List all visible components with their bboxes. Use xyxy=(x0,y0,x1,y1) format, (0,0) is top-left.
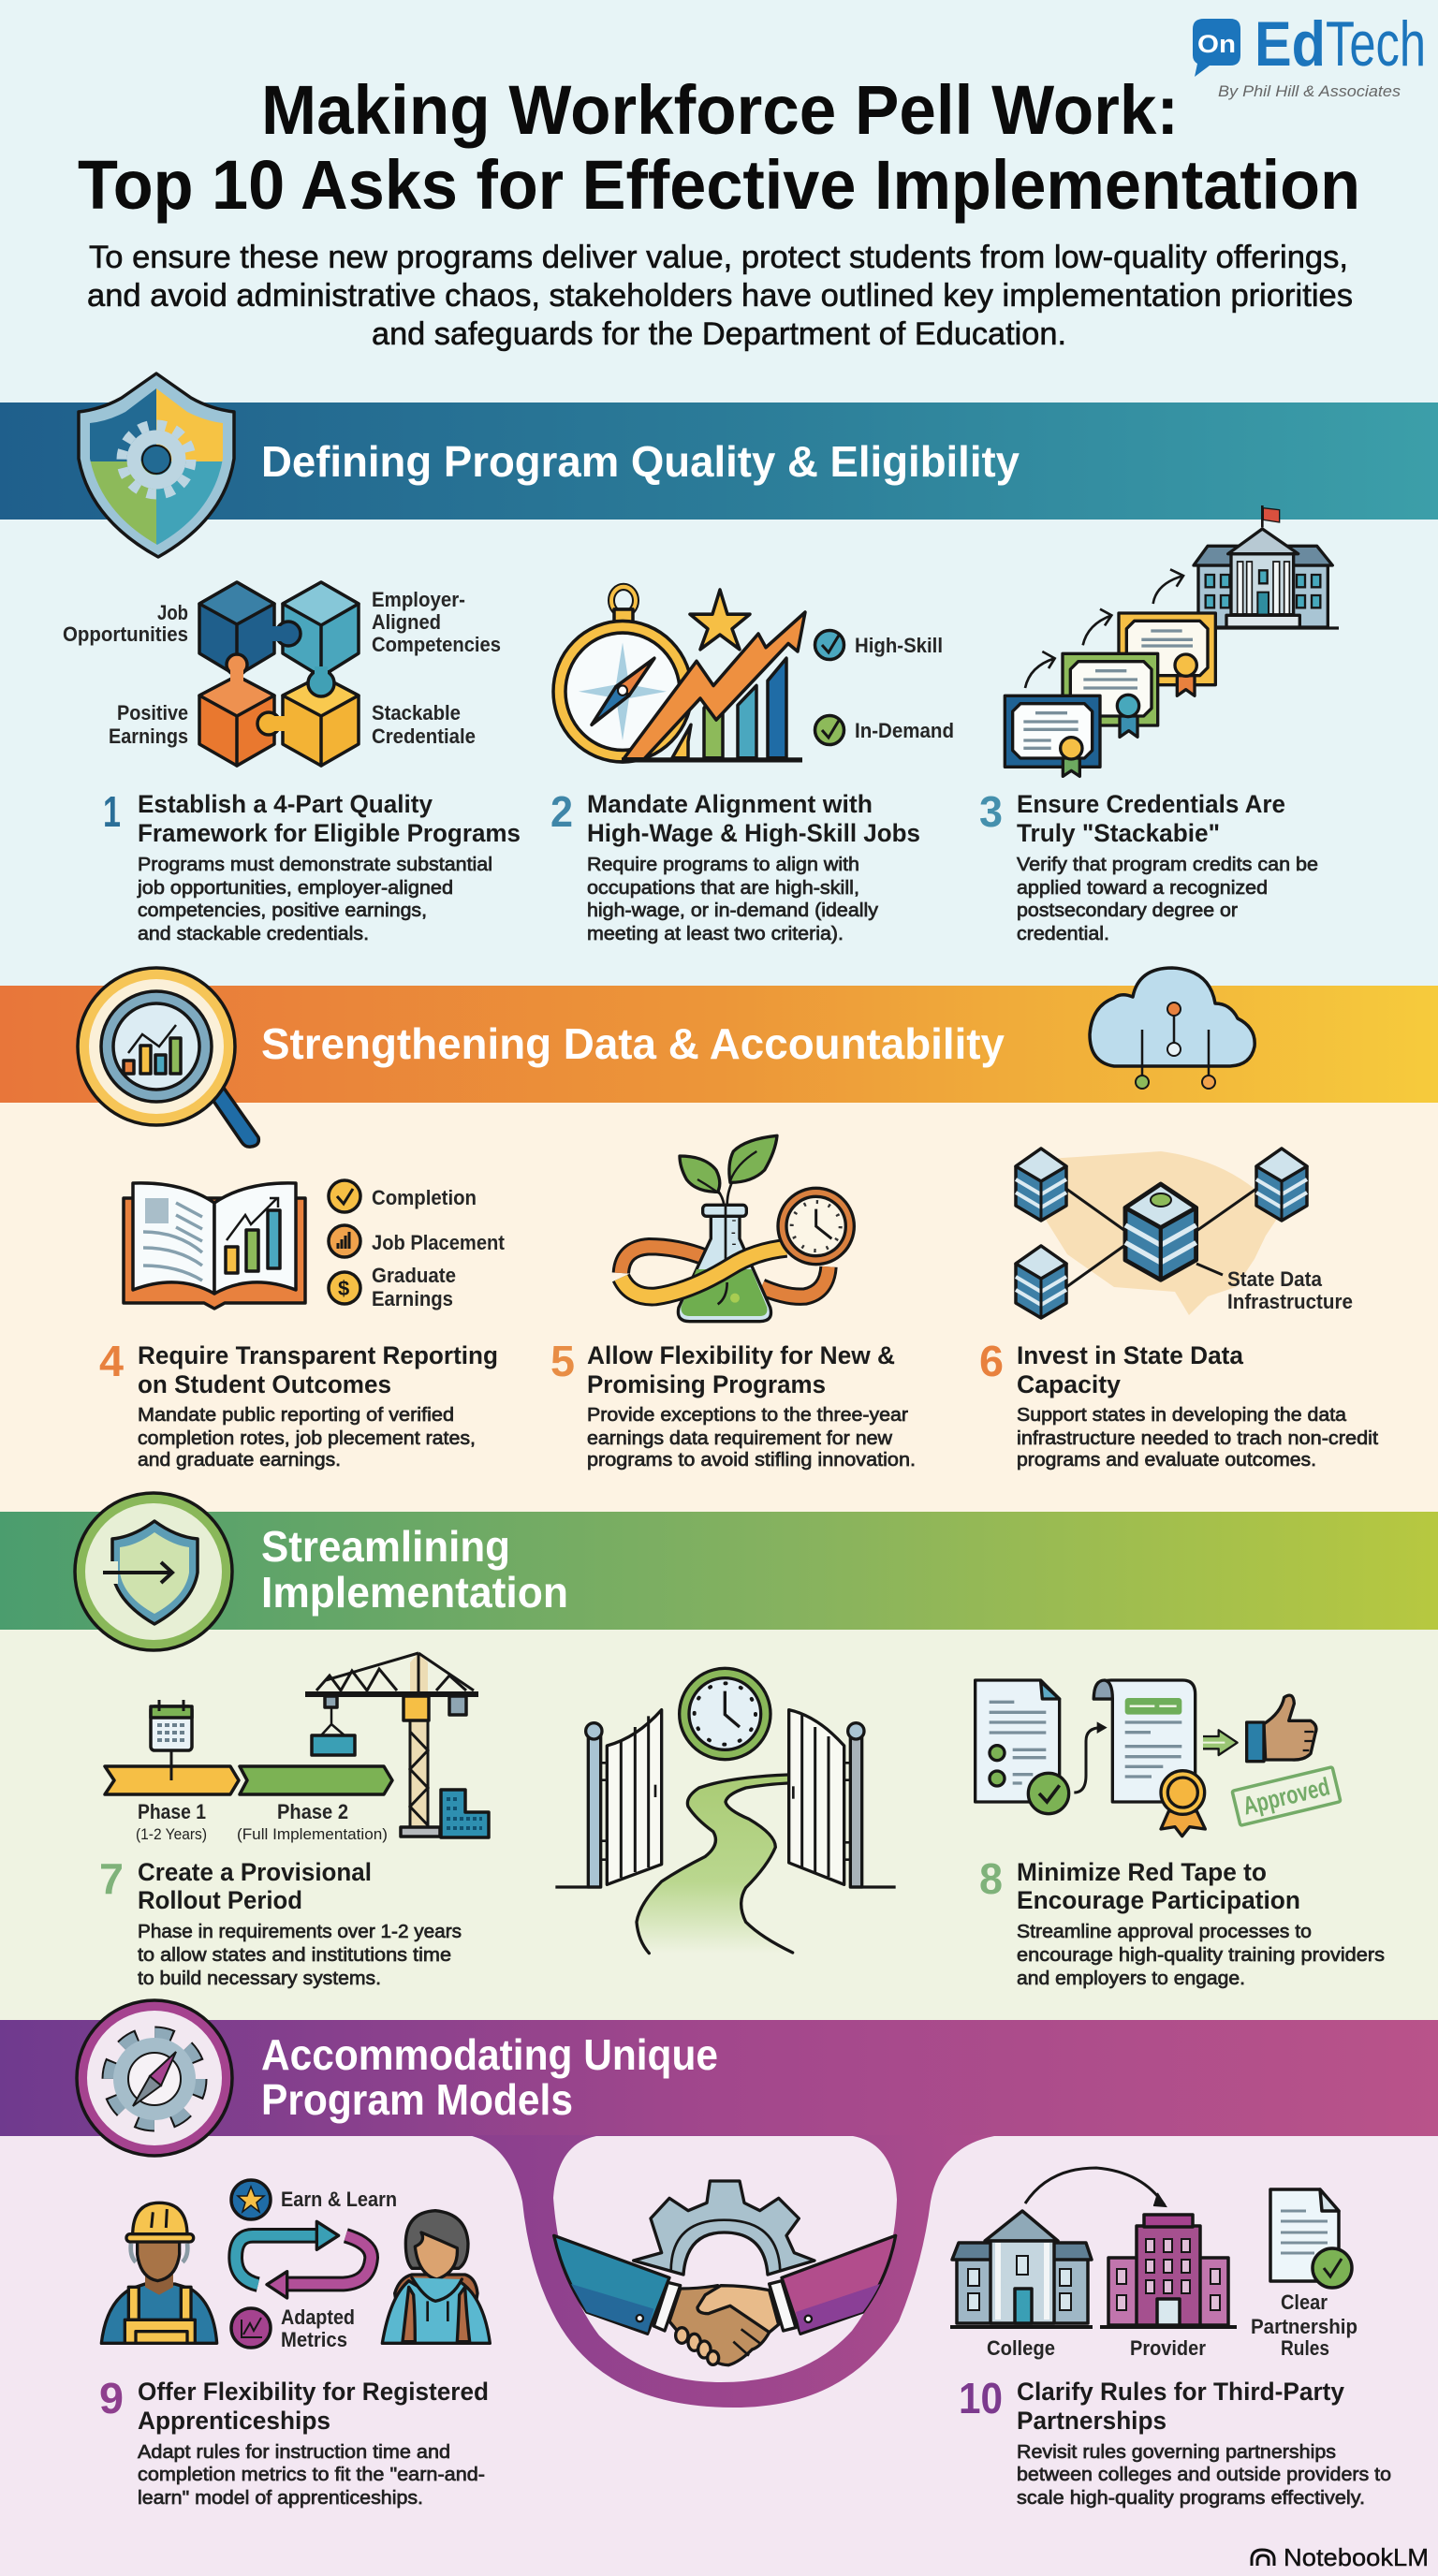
labels: quality framework: Stackable xyxy=(372,701,461,724)
ask 9: Adapt rules for instruction time and xyxy=(138,2442,450,2463)
ask 10: Partnerships xyxy=(1017,2407,1167,2435)
ask 5: Allow Flexibility for New & xyxy=(587,1341,895,1369)
checklist: high-skill and in-demand: In-Demand xyxy=(855,719,954,742)
ask 1: Establish a 4-Part Quality xyxy=(138,790,433,818)
ask 5: Promising Programs xyxy=(587,1370,826,1398)
ask 6: programs and evaluate outcomes. xyxy=(1017,1450,1316,1471)
checklist: reporting outcomes: $ xyxy=(338,1277,349,1300)
labels: quality framework: Positive xyxy=(117,701,188,724)
ask 4: on Student Outcomes xyxy=(138,1370,391,1398)
ask 7: 7 xyxy=(99,1854,124,1903)
ask 5: 5 xyxy=(550,1337,575,1385)
icon: partnership rules document xyxy=(1270,2189,1352,2288)
checklist: reporting outcomes: Completion xyxy=(372,1186,477,1209)
icon: data cloud xyxy=(1090,968,1255,1089)
ask 7 xyxy=(99,1854,462,1989)
icon: shield with arrow xyxy=(75,1493,232,1650)
icon: handshake with gear xyxy=(554,2181,896,2365)
labels: phases: (1-2 Years) xyxy=(136,1825,207,1843)
ask 1: job opportunities, employer-aligned xyxy=(137,878,453,899)
ask 7: Rollout Period xyxy=(138,1886,302,1914)
icon: flask, infinity ribbon and clock xyxy=(621,1135,854,1322)
ask 4 xyxy=(99,1337,498,1471)
ask 5 xyxy=(550,1337,916,1471)
ask 9: 9 xyxy=(99,2374,124,2422)
labels: quality framework: Employer- xyxy=(372,588,465,611)
ask 8: Streamline approval processes to xyxy=(1017,1922,1312,1942)
icon: stacking credentials to college xyxy=(1005,505,1339,776)
icon: earn and learn loop xyxy=(231,2180,397,2351)
ask 3: Ensure Credentials Are xyxy=(1017,790,1285,818)
ask 10: 10 xyxy=(959,2374,1003,2422)
labels: quality framework: Opportunities xyxy=(63,622,188,646)
labels: partnership: Clear xyxy=(1281,2291,1328,2314)
icon: compass and rising arrow xyxy=(553,587,805,762)
labels: partnership xyxy=(987,2291,1357,2360)
icon: earn and learn loop: Adapted xyxy=(281,2305,355,2329)
ask 9: Offer Flexibility for Registered xyxy=(138,2378,489,2406)
icon: college to provider xyxy=(950,2168,1237,2327)
title: Top 10 Asks for Effective Implementation xyxy=(78,146,1360,224)
ask 3: Verify that program credits can be xyxy=(1017,855,1318,875)
stamp: approved xyxy=(1232,1767,1341,1825)
icon: earn and learn loop: Metrics xyxy=(281,2328,347,2351)
ask 10: Revisit rules governing partnerships xyxy=(1017,2442,1336,2463)
ask 10: between colleges and outside providers to xyxy=(1017,2465,1391,2485)
ask 3 xyxy=(979,787,1318,944)
labels: partnership: Provider xyxy=(1130,2336,1206,2360)
checklist: reporting outcomes: Job Placement xyxy=(372,1231,506,1254)
ask 9: Apprenticeships xyxy=(138,2407,330,2435)
ask 2: high-wage, or in-demand (ideally xyxy=(587,900,878,921)
ask 10 xyxy=(959,2374,1391,2509)
ask 2: Require programs to align with xyxy=(587,855,859,875)
logo: OnEdTech: By Phil Hill & Associates xyxy=(1218,82,1401,100)
banner: Defining Program Quality & Eligibility: Defining Program Quality & Eligibility xyxy=(261,437,1020,486)
ask 3: 3 xyxy=(979,787,1003,836)
ask 2: occupations that are high-skill, xyxy=(587,878,859,899)
intro text xyxy=(87,240,1353,352)
labels: quality framework: Competencies xyxy=(372,633,501,656)
labels: phases: (Full Implementation) xyxy=(237,1825,388,1843)
icon: student xyxy=(382,2211,490,2343)
ask 5: Provide exceptions to the three-year xyxy=(587,1405,908,1426)
title xyxy=(78,71,1360,224)
ask 3: postsecondary degree or xyxy=(1017,900,1238,921)
intro text: To ensure these new programs deliver value, protect students from low-quality offerings, xyxy=(89,240,1348,275)
checklist: high-skill and in-demand xyxy=(814,631,954,745)
ask 5: earnings data requirement for new xyxy=(587,1428,893,1449)
ask 6: Capacity xyxy=(1017,1370,1121,1398)
ask 2: meeting at least two criteria). xyxy=(587,924,844,944)
banner: Strengthening Data & Accountability xyxy=(0,986,1438,1103)
icon: open gate, road and clock xyxy=(555,1668,896,1954)
banner: Streamlining Implementation xyxy=(0,1512,1438,1630)
icon: phased timeline with crane xyxy=(105,1653,489,1837)
ask 6: infrastructure needed to trach non-credit xyxy=(1017,1428,1378,1449)
ask 3: credential. xyxy=(1017,924,1109,944)
ask 6: Support states in developing the data xyxy=(1017,1405,1347,1426)
checklist: reporting outcomes: Graduate xyxy=(372,1264,456,1287)
ask 10: Clarify Rules for Third-Party xyxy=(1017,2378,1344,2406)
labels: phases: Phase 2 xyxy=(277,1800,348,1823)
banner: Strengthening Data & Accountability: Strengthening Data & Accountability xyxy=(261,1019,1005,1068)
ask 2 xyxy=(550,787,920,944)
ask 7: to allow states and institutions time xyxy=(138,1945,451,1966)
ask 4: completion rotes, job plecement rates, xyxy=(138,1428,476,1449)
stamp: approved: Approved xyxy=(1240,1772,1332,1821)
ask 9: learn" model of apprenticeships. xyxy=(138,2488,423,2509)
ask 7: Create a Provisional xyxy=(138,1858,372,1886)
labels: partnership: Rules xyxy=(1281,2336,1329,2360)
icon: state data infrastructure map: Infrastructure xyxy=(1227,1290,1353,1313)
icon: worker xyxy=(101,2203,217,2343)
ask 3: Truly "Stackabie" xyxy=(1017,819,1220,847)
banner: Accommodating Unique Program Models: Program Models xyxy=(261,2075,573,2124)
ask 2: Mandate Alignment with xyxy=(587,790,873,818)
logo: OnEdTech: On xyxy=(1197,30,1236,58)
title: Making Workforce Pell Work: xyxy=(261,71,1179,149)
icon: state data infrastructure map: State Data xyxy=(1227,1267,1323,1291)
ask 8: and employers to engage. xyxy=(1017,1969,1245,1989)
ask 4: and graduate earnings. xyxy=(138,1450,341,1471)
banner: Defining Program Quality & Eligibility xyxy=(0,402,1438,520)
labels: quality framework: Job xyxy=(157,601,188,624)
labels: partnership: College xyxy=(987,2336,1055,2360)
ask 6: 6 xyxy=(979,1337,1004,1385)
icon: four-part puzzle xyxy=(199,582,359,766)
ask 2: High-Wage & High-Skill Jobs xyxy=(587,819,920,847)
banner: Streamlining Implementation: Streamlining xyxy=(261,1522,510,1571)
logo: OnEdTech: Ed xyxy=(1255,8,1326,80)
logo: NotebookLM: NotebookLM xyxy=(1284,2543,1429,2571)
labels: phases xyxy=(136,1800,388,1843)
icon: approval documents xyxy=(976,1680,1316,1837)
checklist: reporting outcomes xyxy=(329,1180,506,1310)
ask 1: Framework for Eligible Programs xyxy=(138,819,521,847)
ask 1: and stackable credentials. xyxy=(138,924,369,944)
labels: partnership: Partnership xyxy=(1251,2315,1357,2338)
ask 8: encourage high-quality training providers xyxy=(1017,1945,1385,1966)
checklist: reporting outcomes: Earnings xyxy=(372,1287,453,1310)
ask 8: 8 xyxy=(979,1854,1003,1903)
ask 4: Require Transparent Reporting xyxy=(138,1341,498,1369)
logo: OnEdTech xyxy=(1193,8,1426,100)
ask 5: programs to avoid stifling innovation. xyxy=(587,1450,916,1471)
ask 4: 4 xyxy=(99,1337,124,1385)
ask 1: Programs must demonstrate substantial xyxy=(138,855,492,875)
ask 8: Minimize Red Tape to xyxy=(1017,1858,1267,1886)
intro text: and safeguards for the Department of Education. xyxy=(372,316,1066,352)
icon: state data infrastructure map xyxy=(1016,1149,1353,1318)
icon: gear with compass xyxy=(77,2000,232,2156)
banner: Accommodating Unique Program Models: Accommodating Unique xyxy=(261,2030,718,2079)
ask 4: Mandate public reporting of verified xyxy=(138,1405,454,1426)
icon: puzzle shield xyxy=(79,373,234,557)
ask 8: Encourage Participation xyxy=(1017,1886,1300,1914)
icon: magnifying glass with chart xyxy=(78,968,258,1147)
labels: quality framework: Earnings xyxy=(109,724,188,748)
intro text: and avoid administrative chaos, stakeholders have outlined key implementation priorities xyxy=(87,278,1353,314)
icon: earn and learn loop: Earn & Learn xyxy=(281,2188,397,2211)
labels: quality framework: Credentiale xyxy=(372,724,476,748)
ask 1 xyxy=(103,787,521,944)
banner: Accommodating Unique Program Models xyxy=(0,2020,1438,2408)
ask 6 xyxy=(979,1337,1378,1471)
ask 2: 2 xyxy=(550,787,573,836)
ask 6: Invest in State Data xyxy=(1017,1341,1244,1369)
ask 9 xyxy=(99,2374,489,2509)
icon: open report book xyxy=(124,1183,305,1309)
ask 8 xyxy=(979,1854,1385,1989)
labels: phases: Phase 1 xyxy=(138,1800,206,1823)
ask 7: Phase in requirements over 1-2 years xyxy=(138,1922,462,1942)
ask 7: to build necessary systems. xyxy=(138,1969,381,1989)
ask 3: applied toward a recognized xyxy=(1017,878,1268,899)
ask 10: scale high-quality programs effectively. xyxy=(1017,2488,1365,2509)
labels: quality framework: Aligned xyxy=(372,610,441,634)
ask 1: competencies, positive earnings, xyxy=(138,900,427,921)
checklist: high-skill and in-demand: High-Skill xyxy=(855,634,943,657)
ask 9: completion metrics to fit the "earn-and- xyxy=(138,2465,485,2485)
banner: Streamlining Implementation: Implementation xyxy=(261,1568,568,1617)
ask 1: 1 xyxy=(103,787,121,836)
labels: quality framework xyxy=(63,588,501,748)
